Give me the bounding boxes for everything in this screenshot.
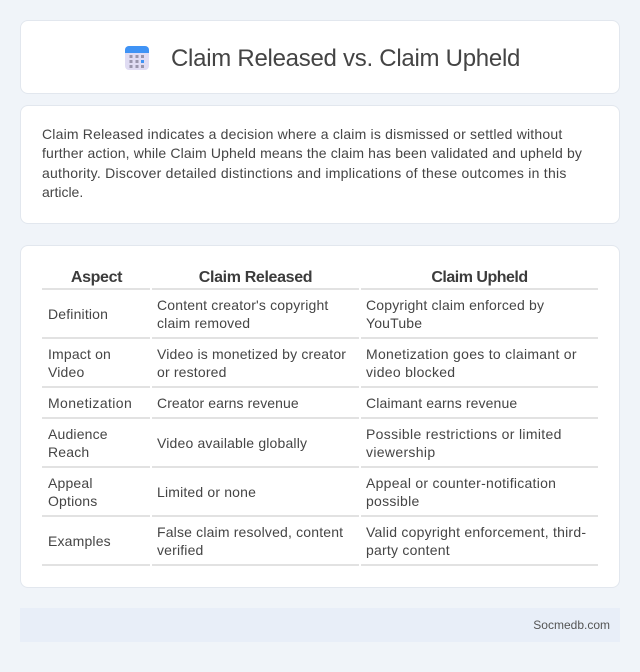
row: Monetization: Creator earns revenue bbox=[157, 395, 299, 411]
intro text: Claim Released indicates a decision where a claim is dismissed or settled without bbox=[42, 126, 562, 142]
row: Audience Reach: Possible restrictions or limited bbox=[366, 426, 562, 442]
row: Appeal Options: Limited or none bbox=[157, 484, 256, 500]
row: Examples: Valid copyright enforcement, third- bbox=[366, 524, 586, 540]
row: Audience Reach bbox=[48, 426, 562, 460]
row: Monetization bbox=[48, 395, 517, 411]
row: Examples: Examples bbox=[48, 533, 111, 549]
intro text: article. bbox=[42, 184, 83, 200]
intro text: authority. Discover detailed distinctions and implications of these outcomes in this bbox=[42, 165, 567, 181]
row: Audience Reach: Video available globally bbox=[157, 435, 307, 451]
icon: calendar bbox=[125, 46, 149, 70]
footer text: Socmedb.com bbox=[533, 618, 610, 632]
row: Definition: Content creator's copyright bbox=[157, 297, 328, 313]
row: Definition bbox=[48, 297, 544, 331]
row: Audience Reach: Audience bbox=[48, 426, 108, 442]
header panel bbox=[20, 20, 620, 94]
intro text: further action, while Claim Upheld means the claim has been validated and upheld by bbox=[42, 145, 582, 161]
row: Appeal Options: Options bbox=[48, 493, 97, 509]
row: Definition: YouTube bbox=[366, 315, 422, 331]
header: Aspect: Aspect bbox=[71, 269, 122, 286]
row: Impact on Video: or restored bbox=[157, 364, 227, 380]
row: Impact on Video: Video is monetized by creator bbox=[157, 346, 346, 362]
row: Definition: Copyright claim enforced by bbox=[366, 297, 544, 313]
row: Audience Reach: Reach bbox=[48, 444, 89, 460]
row: Audience Reach: viewership bbox=[366, 444, 435, 460]
row: Examples: False claim resolved, content bbox=[157, 524, 343, 540]
row: Appeal Options: Appeal bbox=[48, 475, 93, 491]
row: Appeal Options: possible bbox=[366, 493, 420, 509]
row: Impact on Video bbox=[48, 346, 577, 380]
title: Claim Released vs. Claim Upheld bbox=[171, 45, 520, 72]
row: Monetization: Claimant earns revenue bbox=[366, 395, 517, 411]
comparison table bbox=[42, 269, 598, 566]
row: Appeal Options bbox=[48, 475, 556, 509]
row: Definition: Definition bbox=[48, 306, 108, 322]
intro text bbox=[42, 126, 582, 200]
header: Claim Upheld: Claim Upheld bbox=[431, 269, 528, 286]
row: Impact on Video: Monetization goes to claimant or bbox=[366, 346, 577, 362]
row: Impact on Video: Video bbox=[48, 364, 84, 380]
row: Impact on Video: video blocked bbox=[366, 364, 455, 380]
comparison table panel bbox=[20, 245, 620, 588]
row: Examples: party content bbox=[366, 542, 450, 558]
row: Monetization: Monetization bbox=[48, 395, 132, 411]
row: Examples: verified bbox=[157, 542, 204, 558]
footer bar bbox=[20, 608, 620, 642]
row: Definition: claim removed bbox=[157, 315, 250, 331]
intro panel bbox=[20, 105, 620, 224]
row: Examples bbox=[48, 524, 586, 558]
row: Appeal Options: Appeal or counter-notification bbox=[366, 475, 556, 491]
row: Impact on Video: Impact on bbox=[48, 346, 111, 362]
header: Claim Released: Claim Released bbox=[199, 269, 312, 286]
